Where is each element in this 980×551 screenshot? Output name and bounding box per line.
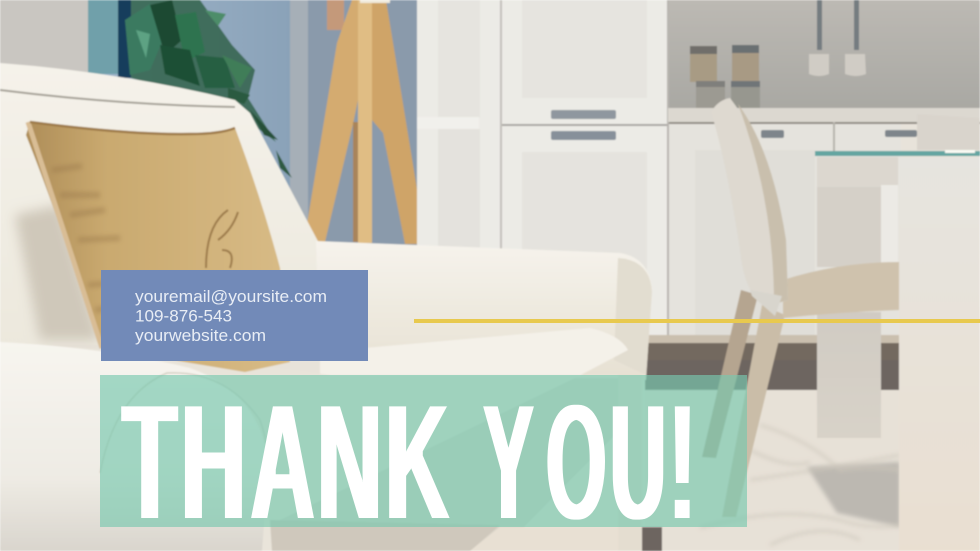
gold cushion <box>26 122 290 372</box>
tripod floor lamp <box>304 0 426 244</box>
dining chair <box>702 98 899 517</box>
contact text: youremail@yoursite.com <box>135 287 327 306</box>
contact details panel <box>101 270 368 361</box>
floor and rug <box>640 335 905 551</box>
title banner <box>100 375 747 527</box>
white armchair <box>0 63 652 551</box>
contact text: yourwebsite.com <box>135 326 266 345</box>
contact text: 109-876-543 <box>135 306 232 326</box>
kitchen cabinets <box>417 0 669 340</box>
contact text <box>135 287 327 345</box>
dining table <box>815 114 980 551</box>
backsplash and counter <box>668 0 980 336</box>
title: THANK YOU! <box>121 375 695 527</box>
window and plant <box>88 0 292 178</box>
yellow accent line <box>414 319 980 323</box>
